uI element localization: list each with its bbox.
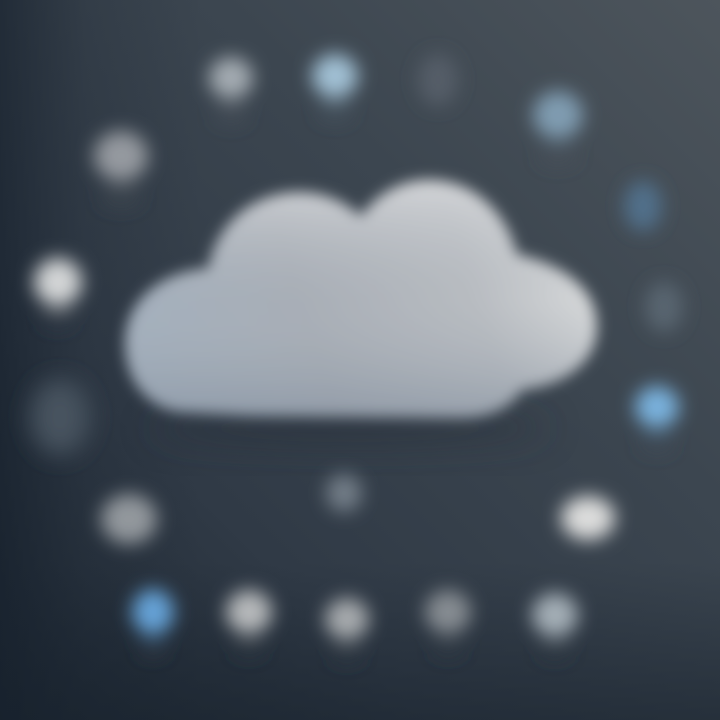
node: bottom blue [132,589,174,658]
node: left large dim [30,379,90,455]
node: right blue [635,386,679,453]
node: top left [94,131,148,209]
node: top 1 [209,57,253,125]
node: top 2 blue [312,54,358,122]
node: top 3 dim [418,54,458,106]
node: left bright [34,258,82,329]
node: bottom 2 [226,590,272,658]
node: lower right bright [561,496,615,540]
icon: central cloud [125,180,597,418]
node: bottom 4 [425,590,471,658]
node: lower left [101,494,157,544]
node: bottom 3 [325,598,369,664]
node: top right blue [533,91,583,166]
cloud shadow [150,412,550,444]
node: right upper [624,181,662,231]
node: bottom 5 [532,593,578,660]
nodes: ring of blurred icons [30,54,683,664]
node: right middle [645,282,683,332]
node: center small [326,474,362,512]
